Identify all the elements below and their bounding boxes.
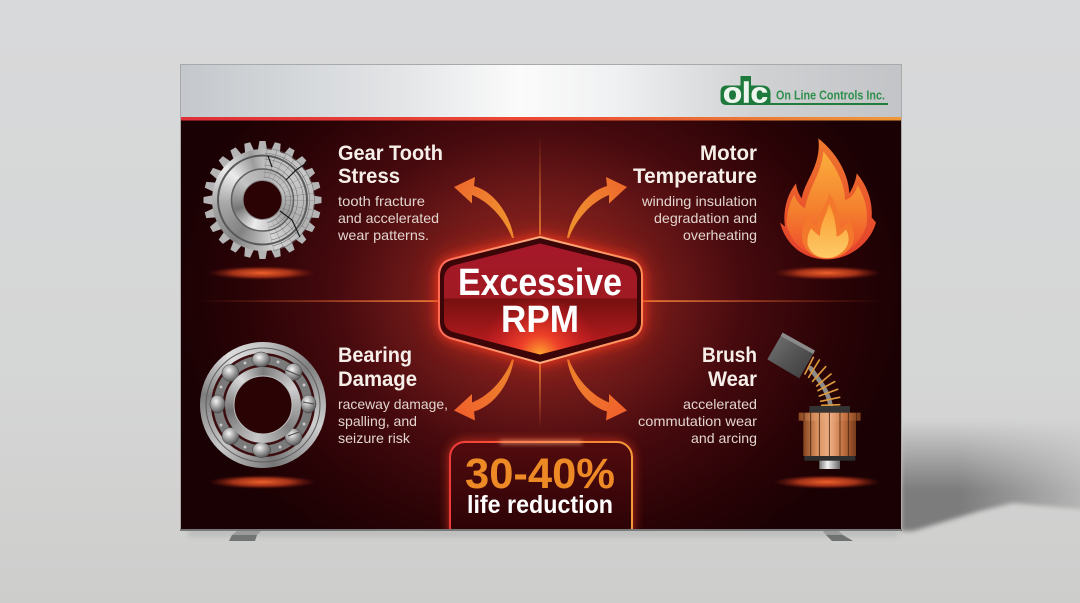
heading — [338, 344, 417, 391]
heading: Bearing — [338, 344, 412, 367]
description: raceway damage, — [338, 396, 448, 412]
background wall and floor — [0, 422, 1080, 603]
description: commutation wear — [638, 413, 757, 429]
header accent strip — [181, 117, 901, 120]
panel: bearing damage — [200, 342, 448, 489]
description: tooth fracture — [338, 193, 425, 209]
arrow: to gear tooth stress — [454, 177, 514, 238]
stat value: 30-40% — [465, 450, 615, 498]
panel artwork background — [181, 120, 901, 529]
description: degradation and — [654, 210, 757, 226]
icon: carbon brush and commutator — [767, 333, 861, 469]
glow under flame — [773, 266, 881, 280]
icon: ball bearing — [200, 342, 326, 468]
description: winding insulation — [641, 193, 757, 209]
glow under gear — [208, 266, 316, 280]
heading: Brush — [702, 344, 757, 367]
description: and arcing — [691, 430, 757, 446]
description: overheating — [683, 227, 757, 243]
description: wear patterns. — [337, 227, 429, 243]
commutator — [799, 406, 861, 469]
heading: Stress — [338, 165, 400, 188]
cast shadow right of panel — [901, 420, 1080, 531]
icon: flame — [780, 138, 876, 259]
badge title — [458, 262, 622, 341]
description — [641, 193, 757, 243]
glow under bearing — [208, 475, 316, 489]
heading — [633, 142, 757, 188]
heading: Damage — [338, 368, 417, 391]
glow under brush — [773, 475, 881, 489]
icon: cracked gear — [204, 141, 322, 259]
description: accelerated — [683, 396, 757, 412]
connector cross lines — [197, 135, 884, 430]
heading: Gear Tooth — [338, 142, 443, 165]
central badge: Excessive RPM — [439, 237, 642, 363]
heading — [702, 344, 757, 391]
description: seizure risk — [338, 430, 411, 446]
heading — [338, 142, 443, 188]
arrow: to motor temperature — [567, 177, 627, 238]
description — [338, 396, 448, 446]
badge title: RPM — [501, 299, 579, 341]
panel: gear tooth stress — [204, 141, 443, 280]
logo mark: olc — [723, 78, 768, 110]
panel frame — [180, 64, 902, 531]
heading: Motor — [700, 142, 757, 165]
description — [337, 193, 439, 243]
display panel — [180, 64, 902, 531]
description — [638, 396, 757, 446]
stand foot left — [229, 530, 262, 541]
description: and accelerated — [338, 210, 439, 226]
heading: Temperature — [633, 165, 757, 188]
stand foot right — [822, 530, 853, 541]
description: spalling, and — [338, 413, 417, 429]
arrow: to brush wear — [567, 360, 627, 420]
spring — [805, 357, 840, 406]
arrow: to bearing damage — [454, 360, 514, 420]
header band — [181, 65, 901, 117]
stat label: life reduction — [467, 491, 613, 519]
panel: brush wear — [638, 333, 881, 489]
logo wordmark: On Line Controls Inc. — [776, 88, 885, 102]
heading: Wear — [708, 368, 757, 391]
carbon brush block — [767, 333, 815, 378]
stat box: 30-40% life reduction — [450, 441, 632, 542]
badge title: Excessive — [458, 262, 622, 304]
logo: On Line Controls Inc. — [720, 76, 888, 110]
panel: motor temperature — [633, 138, 881, 280]
